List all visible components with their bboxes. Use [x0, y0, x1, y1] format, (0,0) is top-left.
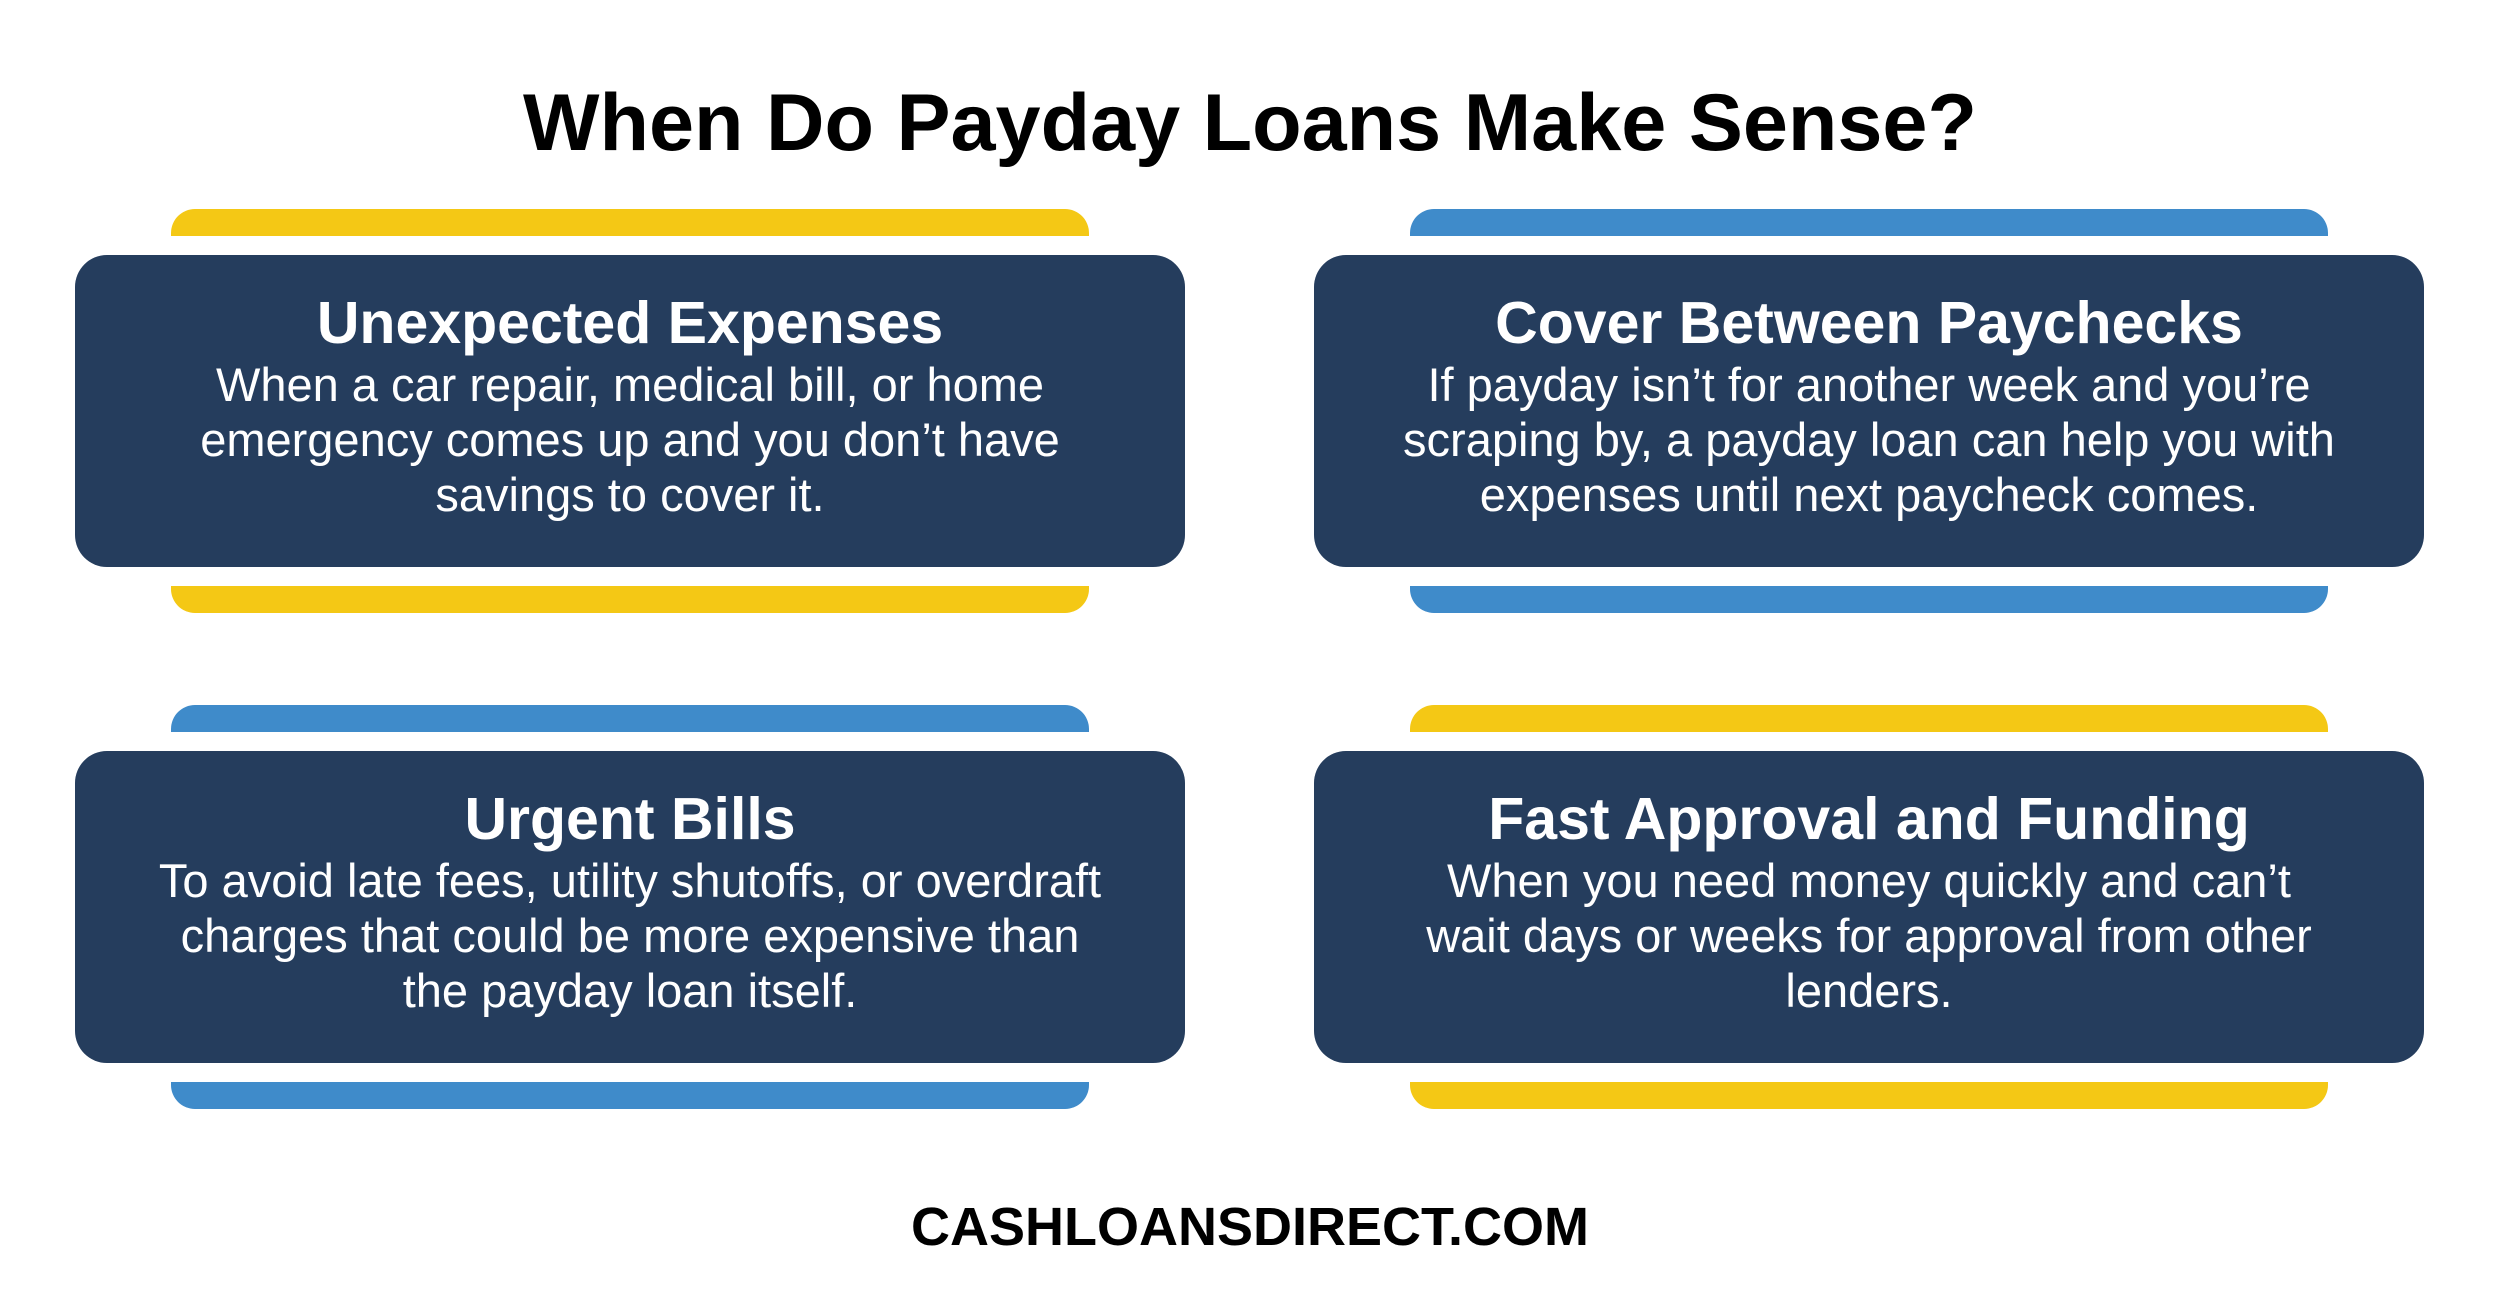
card: the payday loan itself.	[403, 964, 857, 1017]
bottom accent bar	[171, 1082, 1089, 1109]
card: savings to cover it.	[435, 468, 825, 521]
card	[1314, 255, 2424, 567]
panel: urgent bills	[75, 705, 1185, 1109]
card: emergency comes up and you don’t have	[200, 413, 1060, 466]
top accent bar	[171, 705, 1089, 732]
bottom accent bar	[1410, 1082, 2328, 1109]
top accent bar	[1410, 705, 2328, 732]
card: scraping by, a payday loan can help you with	[1403, 413, 2335, 466]
card: Unexpected Expenses	[317, 290, 943, 356]
card: Fast Approval and Funding	[1488, 786, 2250, 852]
card: To avoid late fees, utility shutoffs, or overdraft	[159, 854, 1101, 907]
card: lenders.	[1785, 964, 1953, 1017]
card: When a car repair, medical bill, or home	[216, 358, 1044, 411]
panel: unexpected expenses	[75, 209, 1185, 613]
panel: cover between paychecks	[1314, 209, 2424, 613]
card: wait days or weeks for approval from other	[1426, 909, 2312, 962]
card: expenses until next paycheck comes.	[1480, 468, 2258, 521]
card: Cover Between Paychecks	[1495, 290, 2243, 356]
card: If payday isn’t for another week and you’re	[1427, 358, 2311, 411]
card	[75, 255, 1185, 567]
top accent bar	[1410, 209, 2328, 236]
footer brand: CASHLOANSDIRECT.COM	[911, 1197, 1589, 1257]
card: charges that could be more expensive than	[181, 909, 1079, 962]
top accent bar	[171, 209, 1089, 236]
card	[75, 751, 1185, 1063]
card: Urgent Bills	[464, 786, 796, 852]
card: When you need money quickly and can’t	[1447, 854, 2291, 907]
title: When Do Payday Loans Make Sense?	[523, 78, 1977, 168]
bottom accent bar	[1410, 586, 2328, 613]
card	[1314, 751, 2424, 1063]
bottom accent bar	[171, 586, 1089, 613]
panel: fast approval and funding	[1314, 705, 2424, 1109]
